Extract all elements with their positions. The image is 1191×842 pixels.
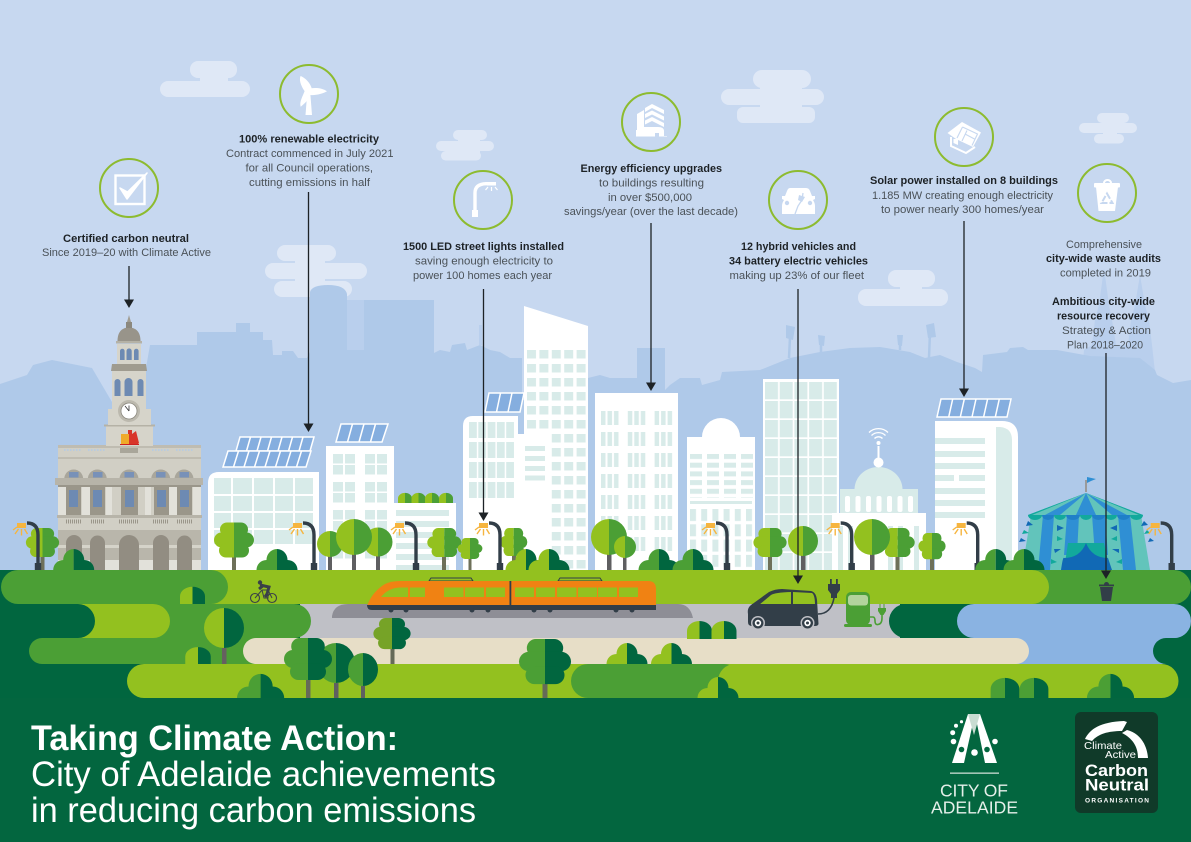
text: LED street lights: saving enough electricity to xyxy=(415,256,553,268)
item: LED street lights xyxy=(403,171,568,521)
text: certified carbon neutral: Certified carbon neutral xyxy=(63,233,189,245)
electric car xyxy=(748,579,840,630)
title: in reducing carbon emissions xyxy=(31,791,476,830)
text: solar power: 1.185 MW creating enough electricity xyxy=(872,190,1053,202)
text: waste and recovery: completed in 2019 xyxy=(1060,268,1151,280)
street lamps xyxy=(13,523,1175,570)
title: Taking Climate Action: xyxy=(31,719,398,758)
text: energy efficiency upgrades: savings/year (over the last decade) xyxy=(564,206,738,218)
item: solar power on buildings xyxy=(870,108,1062,397)
text: energy efficiency upgrades: Energy efficiency upgrades xyxy=(580,163,722,175)
building: tall angled tower xyxy=(524,306,588,570)
icon: recycling bin xyxy=(1078,164,1136,222)
arrow: to street lamp xyxy=(478,289,488,521)
text: LED street lights: 1500 LED street lights installed xyxy=(403,241,564,253)
logo: Climate Active Carbon Neutral: Active xyxy=(1105,749,1136,761)
logo: Climate Active Carbon Neutral: ORGANISATION xyxy=(1085,798,1149,805)
text: waste and recovery: city-wide waste audits xyxy=(1046,253,1161,265)
building: windowed block xyxy=(595,393,678,570)
arrow: to car xyxy=(793,289,803,584)
logo: Climate Active Carbon Neutral: Neutral xyxy=(1085,776,1149,794)
background bushes xyxy=(53,549,1044,570)
text: waste and recovery: Plan 2018–2020 xyxy=(1067,340,1143,352)
icon: front of car with plug xyxy=(769,171,827,229)
foreground trees and bushes xyxy=(180,587,1134,698)
text: waste and recovery: Ambitious city-wide xyxy=(1052,296,1155,308)
text: renewable electricity: for all Council operations, xyxy=(246,162,373,174)
arrow: to windowed block xyxy=(646,223,656,391)
text: solar power: to power nearly 300 homes/year xyxy=(881,204,1044,216)
icon: check box xyxy=(100,159,158,217)
waste bin xyxy=(1099,582,1114,601)
solar panels on mid tower xyxy=(485,393,524,412)
text: solar power: Solar power installed on 8 buildings xyxy=(870,175,1058,187)
background street trees xyxy=(26,519,946,570)
footer band xyxy=(0,698,1191,842)
text: vehicles: making up 23% of our fleet xyxy=(730,270,864,282)
icon: house with solar panels xyxy=(935,108,993,166)
icon: street light xyxy=(454,171,512,229)
text: waste and recovery: Comprehensive xyxy=(1066,239,1142,251)
item: renewable electricity xyxy=(226,65,398,432)
text: energy efficiency upgrades: to buildings resulting xyxy=(599,178,704,190)
building: capitol dome with wifi xyxy=(832,429,926,570)
item: hybrid and electric vehicles xyxy=(729,171,872,584)
text: energy efficiency upgrades: in over $500,000 xyxy=(608,192,692,204)
building: green roof block xyxy=(394,493,456,570)
ground bands xyxy=(0,570,1191,842)
festival tent xyxy=(1019,477,1154,570)
solar panels on solar tower xyxy=(937,399,1011,417)
cyclist xyxy=(250,580,276,602)
arrow: to solar tower xyxy=(959,221,969,397)
text: certified carbon neutral: Since 2019–20 with Climate Active xyxy=(42,247,211,259)
charging station xyxy=(844,592,886,627)
arrow: to town hall xyxy=(124,266,134,308)
train xyxy=(332,578,693,618)
item: energy efficiency upgrades xyxy=(564,93,738,391)
distant skyline xyxy=(0,268,1191,570)
logo: City of Adelaide: CITY OF xyxy=(940,780,1008,800)
building: glass tower xyxy=(763,379,839,570)
building: solar tower xyxy=(935,399,1018,570)
logo: Climate Active Carbon Neutral xyxy=(1075,712,1158,813)
building: white block with panels xyxy=(326,424,394,570)
solar panels on block xyxy=(336,424,388,442)
text: renewable electricity: cutting emissions in half xyxy=(249,177,371,189)
text: LED street lights: power 100 homes each year xyxy=(413,270,552,282)
logo: Climate Active Carbon Neutral: Climate xyxy=(1084,740,1122,752)
text: waste and recovery: resource recovery xyxy=(1057,310,1151,322)
text: renewable electricity: Contract commenced in July 2021 xyxy=(226,148,394,160)
text: vehicles: 12 hybrid vehicles and xyxy=(741,241,856,253)
text: vehicles: 34 battery electric vehicles xyxy=(729,256,868,268)
text: waste and recovery: Strategy & Action xyxy=(1062,325,1151,337)
item: certified carbon neutral xyxy=(42,159,211,308)
building: mid tower with panels xyxy=(463,393,550,570)
logo: City of Adelaide xyxy=(931,714,1018,818)
building: solar office xyxy=(208,437,319,570)
arrow: to bin xyxy=(1101,353,1111,579)
solar panels on office xyxy=(223,437,314,467)
building: town hall xyxy=(55,315,203,570)
item: waste audits and recovery xyxy=(1046,164,1165,579)
plug and cord xyxy=(818,579,840,614)
title: City of Adelaide achievements xyxy=(31,755,496,794)
clouds xyxy=(160,61,1137,306)
text: renewable electricity: 100% renewable electricity xyxy=(239,134,380,146)
logo: Climate Active Carbon Neutral: Carbon xyxy=(1085,762,1148,780)
icon: wind turbine xyxy=(280,65,338,123)
logo: City of Adelaide: ADELAIDE xyxy=(931,798,1018,818)
arrow: to solar office xyxy=(304,192,314,432)
icon: stacked building xyxy=(622,93,680,151)
building: domed block xyxy=(687,418,755,570)
